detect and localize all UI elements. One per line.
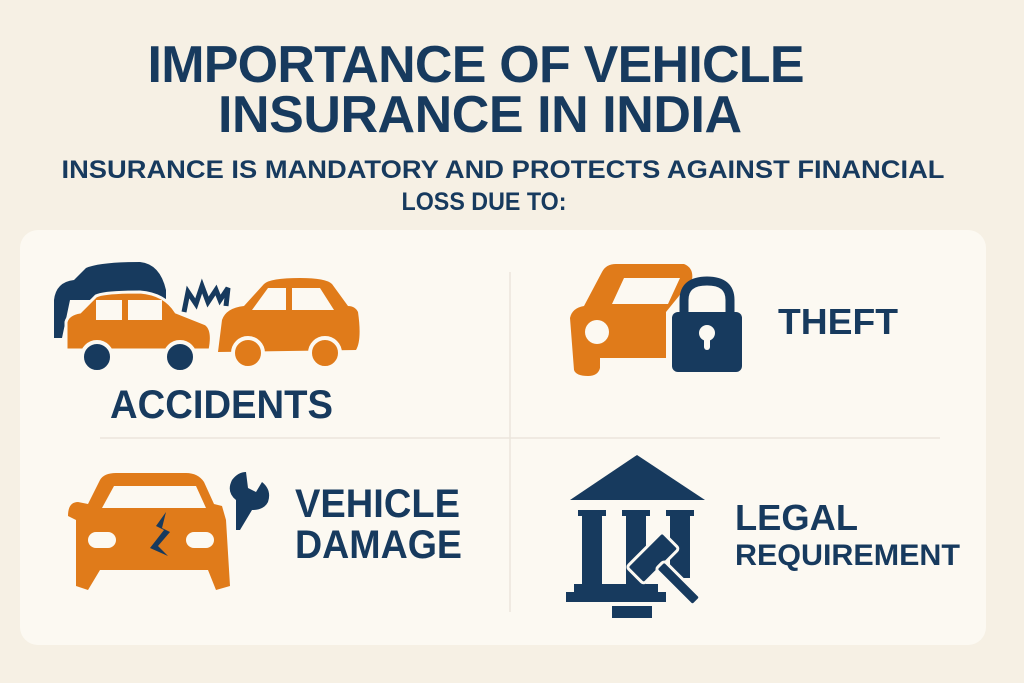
panel: main card [20,230,986,645]
icon: courthouse with gavel [566,455,714,619]
label: vehicle damage: DAMAGE [295,523,462,567]
label: vehicle damage: VEHICLE [295,482,460,526]
label: legal requirement: REQUIREMENT [735,539,960,572]
subtitle: INSURANCE IS MANDATORY AND PROTECTS AGAINST FINANCIAL [62,156,944,184]
label: theft: THEFT [778,301,898,342]
label: accidents: ACCIDENTS [110,383,333,427]
icon: accident cars [54,262,360,372]
icon: car with lock [570,264,742,376]
label: legal requirement [735,497,960,572]
title: IMPORTANCE OF VEHICLE [148,36,804,94]
subtitle: LOSS DUE TO: [402,188,566,216]
title [148,36,804,144]
label: legal requirement: LEGAL [735,497,858,538]
title: INSURANCE IN INDIA [218,86,742,144]
label: vehicle damage [295,482,462,567]
icon: damaged car with wrench [68,472,269,590]
subtitle [62,156,944,216]
